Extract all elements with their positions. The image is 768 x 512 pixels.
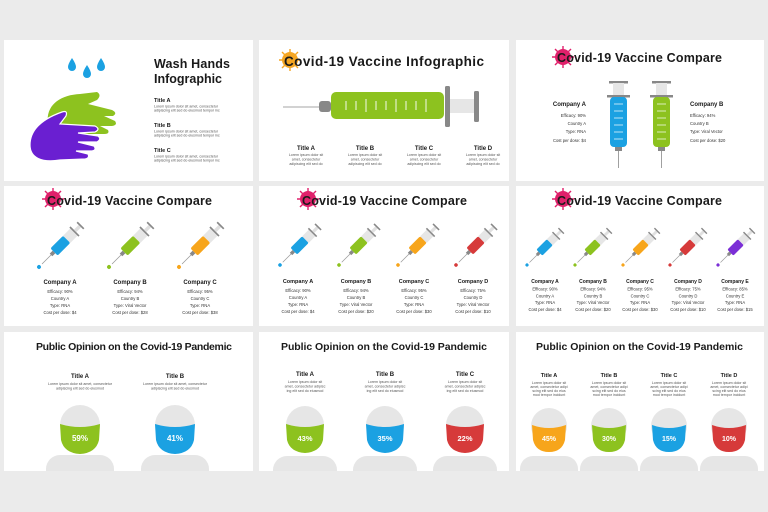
- text blocks A-D: Title D: [474, 146, 493, 152]
- company B text: Cost per dose: $20: [690, 138, 726, 143]
- company A text: Type: RNA: [566, 129, 586, 134]
- slide 5: compare 4: [259, 186, 509, 326]
- masked figures: 45%: [542, 436, 557, 443]
- company texts: Efficacy: 95%: [187, 289, 213, 294]
- text blocks: Title B: [376, 372, 395, 378]
- company A text: Efficacy: 90%: [561, 113, 586, 118]
- company texts: Cost per dose: $30: [396, 309, 432, 314]
- title: Covid-19 Vaccine Compare: [47, 194, 212, 208]
- text blocks A-C: Lorem ipsum dolor sit amet, consectetur: [154, 154, 219, 158]
- company texts: Cost per dose: $28: [112, 310, 148, 315]
- company texts: Country A: [536, 294, 554, 298]
- company texts: Cost per dose: $15: [717, 307, 753, 312]
- company B text: Country B: [690, 121, 709, 126]
- text blocks: amet, consectetur adipi: [650, 385, 688, 389]
- masked figures: 15%: [662, 436, 677, 443]
- company texts: Country D: [679, 294, 697, 298]
- icon: water drops: [68, 58, 105, 78]
- text blocks: ing elit sed do eiusmod: [447, 389, 483, 393]
- text blocks: ing elit sed do eiusmod: [367, 389, 403, 393]
- company texts: Cost per dose: $20: [338, 309, 374, 314]
- company texts: Efficacy: 75%: [460, 288, 486, 293]
- text blocks: Lorem ipsum dolor sit: [288, 380, 322, 384]
- company texts: Type: RNA: [404, 302, 424, 307]
- text blocks: mod tempor incidunt: [593, 393, 625, 397]
- company texts: Type: RNA: [190, 303, 210, 308]
- company texts: Company D: [674, 279, 702, 285]
- text blocks: [285, 372, 486, 393]
- text blocks: Title D: [721, 373, 737, 379]
- text blocks: scing elit sed do eius: [592, 389, 626, 393]
- masked figures: [46, 405, 209, 485]
- text blocks: Lorem ipsum dolor sit: [712, 381, 746, 385]
- text blocks: Title B: [601, 373, 617, 379]
- big syringe: [283, 86, 479, 127]
- title: Public Opinion on the Covid-19 Pandemic: [36, 341, 232, 353]
- text blocks A-D: adipiscing elit sed do: [289, 162, 323, 166]
- masked figures: 59%: [72, 434, 88, 443]
- company texts: Company B: [579, 279, 607, 285]
- text blocks A-D: adipiscing elit sed do: [466, 162, 500, 166]
- company texts: Country E: [726, 294, 745, 298]
- company texts: Country C: [191, 296, 209, 301]
- text blocks: amet, consectetur adipi: [710, 385, 748, 389]
- icon: pink virus: [42, 188, 64, 210]
- company texts: Company D: [458, 279, 488, 285]
- title: Public Opinion on the Covid-19 Pandemic: [281, 341, 487, 353]
- text blocks A-C: [154, 98, 220, 162]
- text blocks: Lorem ipsum dolor sit: [532, 381, 566, 385]
- text blocks: Lorem ipsum dolor sit: [448, 380, 482, 384]
- title: Public Opinion on the Covid-19 Pandemic: [536, 341, 743, 353]
- company texts: Efficacy: 95%: [627, 286, 653, 292]
- text blocks: amet, consectetur adipi: [530, 385, 568, 389]
- company texts: Company B: [113, 280, 147, 286]
- company texts: Company E: [721, 279, 749, 285]
- masked figures: [273, 406, 497, 486]
- company texts: Country B: [347, 295, 366, 300]
- title: [154, 57, 230, 86]
- icon: pink virus: [552, 188, 574, 210]
- text blocks A-D: amet, consectetur: [469, 158, 498, 162]
- company texts: Company C: [183, 280, 217, 286]
- company texts: Company B: [341, 279, 371, 285]
- slide 3: compare 2: [516, 40, 764, 181]
- company texts: Efficacy: 94%: [580, 286, 606, 292]
- company texts: Type: RNA: [288, 302, 308, 307]
- text blocks A-D: Lorem ipsum dolor sit: [407, 153, 441, 157]
- company texts: Company A: [531, 279, 559, 285]
- text blocks A-D: Lorem ipsum dolor sit: [289, 153, 323, 157]
- text blocks A-C: Title A: [154, 98, 171, 104]
- masked figures: 10%: [722, 436, 737, 443]
- vertical syringes: [607, 81, 673, 168]
- company B text: Company B: [690, 102, 724, 108]
- company texts: Type: Viral Vector: [457, 302, 490, 307]
- title: Covid-19 Vaccine Compare: [302, 194, 467, 208]
- company texts: [281, 279, 491, 314]
- company texts: Cost per dose: $38: [182, 310, 218, 315]
- slide 7: opinion 2: [4, 332, 253, 485]
- syringes: [33, 220, 226, 273]
- text blocks A-D: adipiscing elit sed do: [348, 162, 382, 166]
- text blocks A-C: Title C: [154, 148, 171, 154]
- company texts: Type: RNA: [535, 300, 555, 305]
- company texts: Cost per dose: $10: [670, 307, 706, 312]
- text blocks: ing elit sed do eiusmod: [287, 389, 323, 393]
- text blocks: scing elit sed do eius: [652, 389, 686, 393]
- text blocks A-D: Title C: [415, 146, 434, 152]
- masked figures: 43%: [297, 434, 313, 443]
- text blocks A-D: amet, consectetur: [292, 158, 321, 162]
- masked figures: [520, 408, 758, 486]
- company B text: Efficacy: 94%: [690, 113, 716, 118]
- company texts: Country C: [631, 294, 649, 298]
- text blocks: mod tempor incidunt: [713, 393, 745, 397]
- company B text: Type: Viral Vector: [690, 129, 723, 134]
- text blocks: amet, consectetur adipisc: [285, 384, 326, 388]
- text blocks: Title A: [296, 372, 315, 378]
- company texts: Country B: [584, 294, 603, 298]
- icon: green hand: [48, 92, 116, 135]
- company texts: Country A: [51, 296, 69, 301]
- company texts: Country C: [405, 295, 423, 300]
- icon: pink virus: [552, 46, 574, 68]
- company A text: Country A: [568, 121, 586, 126]
- company texts: Company C: [399, 279, 429, 285]
- title: Covid-19 Vaccine Compare: [557, 51, 722, 65]
- text blocks: mod tempor incidunt: [653, 393, 685, 397]
- company texts: Efficacy: 85%: [722, 286, 748, 292]
- company texts: Efficacy: 94%: [117, 289, 143, 294]
- company texts: [528, 279, 753, 312]
- company texts: Efficacy: 95%: [401, 288, 427, 293]
- company texts: Type: Viral Vector: [340, 302, 373, 307]
- slide 4: compare 3: [4, 186, 253, 326]
- company texts: Type: Viral Vector: [577, 300, 610, 305]
- text blocks: Lorem ipsum dolor sit: [592, 381, 626, 385]
- text blocks: Title A: [541, 373, 557, 379]
- text blocks A-D: amet, consectetur: [410, 158, 439, 162]
- slide 8: opinion 3: [259, 332, 509, 486]
- text blocks A-D: adipiscing elit sed do: [407, 162, 441, 166]
- company texts: Cost per dose: $4: [43, 310, 77, 315]
- text blocks A-C: Lorem ipsum dolor sit amet, consectetur: [154, 130, 219, 134]
- company texts: Type: Viral Vector: [672, 300, 705, 305]
- company A text: [553, 102, 587, 143]
- company A text: Company A: [553, 102, 587, 108]
- company texts: [43, 280, 218, 315]
- company texts: Country D: [464, 295, 482, 300]
- company texts: Type: RNA: [50, 303, 70, 308]
- text blocks: amet, consectetur adipi: [590, 385, 628, 389]
- masked figures: 30%: [602, 436, 617, 443]
- text blocks: scing elit sed do eius: [712, 389, 746, 393]
- text blocks: Title C: [456, 372, 475, 378]
- text blocks A-C: adipiscing elit sed do eiusmod tempor inc: [154, 134, 220, 138]
- text blocks A-C: adipiscing elit sed do eiusmod tempor inc: [154, 158, 220, 162]
- company texts: Country B: [121, 296, 140, 301]
- company texts: Country A: [289, 295, 307, 300]
- text blocks A-D: Title A: [297, 146, 316, 152]
- company texts: Company A: [283, 279, 313, 285]
- title: Infographic: [154, 72, 222, 86]
- icon: pink virus: [297, 188, 319, 210]
- text blocks: Title A: [71, 374, 90, 380]
- company texts: Company A: [43, 280, 77, 286]
- syringes: [522, 227, 756, 270]
- company texts: Cost per dose: $30: [622, 307, 658, 312]
- text blocks A-D: Lorem ipsum dolor sit: [466, 153, 500, 157]
- company texts: Cost per dose: $10: [455, 309, 491, 314]
- title: Covid-19 Vaccine Infographic: [284, 54, 484, 69]
- text blocks: Lorem ipsum dolor sit: [652, 381, 686, 385]
- company texts: Type: RNA: [725, 300, 745, 305]
- icon: purple hand: [30, 112, 100, 161]
- text blocks: adipiscing elit sed do eiusmod: [151, 386, 199, 390]
- text blocks: [530, 373, 748, 397]
- text blocks: adipiscing elit sed do eiusmod: [56, 386, 104, 390]
- text blocks: mod tempor incidunt: [533, 393, 565, 397]
- text blocks: amet, consectetur adipisc: [365, 384, 406, 388]
- company A text: Cost per dose: $4: [553, 138, 587, 143]
- icon: orange virus: [279, 49, 301, 71]
- company texts: Efficacy: 90%: [532, 286, 558, 292]
- company texts: Cost per dose: $4: [281, 309, 315, 314]
- masked figures: 41%: [167, 434, 183, 443]
- text blocks A-C: Lorem ipsum dolor sit amet, consectetur: [154, 104, 219, 108]
- text blocks: Title B: [166, 374, 185, 380]
- company texts: Type: Viral Vector: [114, 303, 147, 308]
- title: Covid-19 Vaccine Compare: [557, 194, 722, 208]
- company texts: Efficacy: 75%: [675, 286, 701, 292]
- company B text: [690, 102, 726, 143]
- slide 1: wash hands: [4, 40, 253, 181]
- syringes: [275, 222, 499, 270]
- slide 2: vaccine infographic: [259, 40, 509, 181]
- text blocks A-D: Title B: [356, 146, 375, 152]
- company texts: Cost per dose: $20: [575, 307, 611, 312]
- text blocks: Lorem ipsum dolor sit amet, consectetur: [48, 382, 113, 386]
- text blocks: Lorem ipsum dolor sit: [368, 380, 402, 384]
- company texts: Efficacy: 94%: [343, 288, 369, 293]
- text blocks: amet, consectetur adipisc: [445, 384, 486, 388]
- company texts: Type: RNA: [630, 300, 650, 305]
- text blocks: Lorem ipsum dolor sit amet, consectetur: [143, 382, 208, 386]
- text blocks A-C: Title B: [154, 123, 171, 129]
- company texts: Efficacy: 90%: [285, 288, 311, 293]
- text blocks: Title C: [661, 373, 677, 379]
- masked figures: 22%: [457, 434, 473, 443]
- text blocks A-D: amet, consectetur: [351, 158, 380, 162]
- text blocks: scing elit sed do eius: [532, 389, 566, 393]
- company texts: Company C: [626, 279, 654, 285]
- title: Wash Hands: [154, 57, 230, 71]
- text blocks A-D: Lorem ipsum dolor sit: [348, 153, 382, 157]
- text blocks: [48, 374, 208, 390]
- company texts: Cost per dose: $4: [528, 307, 562, 312]
- text blocks A-D: [289, 146, 500, 166]
- slide 6: compare 5: [516, 186, 764, 326]
- masked figures: 35%: [377, 434, 393, 443]
- company texts: Efficacy: 90%: [47, 289, 73, 294]
- slide 9: opinion 4: [516, 332, 764, 486]
- text blocks A-C: adipiscing elit sed do eiusmod tempor inc: [154, 108, 220, 112]
